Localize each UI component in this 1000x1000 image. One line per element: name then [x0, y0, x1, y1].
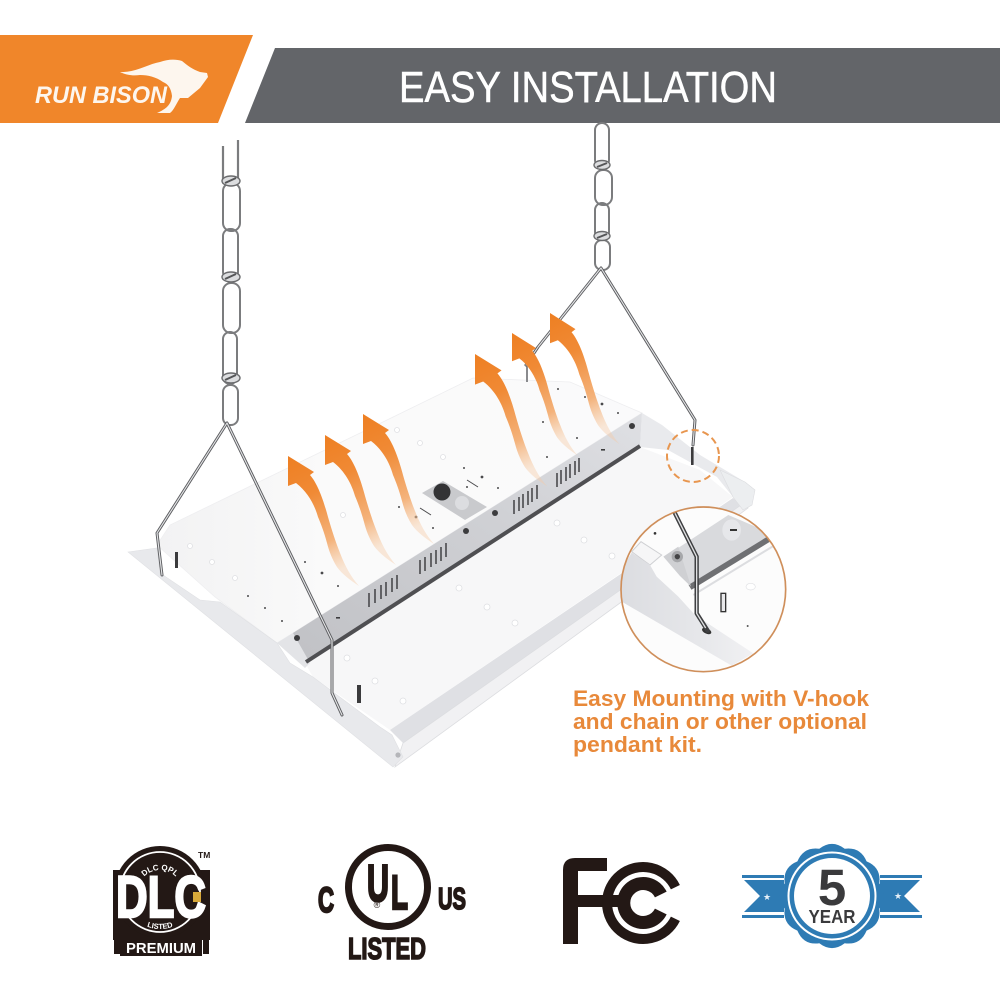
front light strip — [395, 505, 748, 767]
arrow 2 — [325, 435, 396, 565]
right end cap — [640, 413, 755, 505]
right chain — [594, 123, 612, 270]
certification: FCC — [563, 858, 675, 944]
left chain — [222, 140, 240, 425]
caption text — [573, 686, 870, 757]
magnified detail circle — [615, 507, 786, 672]
hook slots — [175, 366, 694, 703]
gold square — [193, 892, 201, 902]
product: LED high bay panel — [128, 366, 755, 767]
lower plate — [305, 447, 733, 730]
badge label: YEAR — [808, 907, 856, 927]
certification: cUL us listed: ® — [374, 900, 381, 910]
front gray band — [390, 498, 741, 743]
title: EASY INSTALLATION — [399, 63, 777, 112]
certification: cUL us listed: LISTED — [348, 931, 426, 966]
right V-hook — [526, 268, 695, 445]
upper plate — [157, 378, 642, 643]
rail holes — [294, 423, 635, 641]
central rail — [290, 413, 642, 663]
title banner — [245, 48, 1000, 123]
rail shadow strip — [306, 446, 640, 662]
ribbons — [742, 875, 922, 918]
arrow 1 — [288, 456, 359, 586]
certification: cUL us listed: U — [367, 855, 389, 913]
badge: 5 year warranty: ★ — [894, 891, 902, 901]
arrow 6 — [550, 313, 620, 444]
premium ribbon — [114, 934, 120, 954]
caption text: Easy Mounting with V-hook — [573, 686, 870, 711]
surface bumps — [188, 428, 615, 704]
logo wordmark: RUN BISON — [35, 82, 168, 109]
DLC letters: DLC — [116, 865, 206, 930]
icon: bison head — [120, 60, 208, 113]
badge number: 5 — [818, 859, 846, 916]
certification: DLC premium — [113, 846, 210, 957]
scalloped seal — [780, 844, 884, 948]
logo banner: Run Bison — [0, 35, 253, 123]
certification: cUL us listed: C — [318, 881, 334, 920]
rail vents — [369, 458, 579, 607]
junction plate — [422, 481, 487, 520]
badge: 5 year warranty: ★ — [763, 892, 771, 902]
callout marker: dashed circle — [667, 430, 719, 482]
end screw — [395, 752, 401, 758]
certification: cUL us listed — [318, 848, 466, 966]
certification: cUL us listed: L — [391, 867, 408, 920]
arrow 5 — [512, 333, 577, 455]
airflow arrows — [288, 313, 620, 586]
caption text: and chain or other optional — [573, 709, 867, 734]
certification: DLC premium: PREMIUM — [126, 941, 196, 957]
certification: cUL us listed: US — [438, 881, 466, 916]
LISTED label: LISTED — [147, 922, 172, 929]
rail flange — [277, 633, 310, 668]
badge: 5 year warranty — [742, 844, 922, 948]
right end block — [720, 470, 755, 510]
left V-hook — [157, 423, 342, 715]
DLC QPL label: DLC QPL — [141, 864, 177, 876]
trademark: TM — [198, 850, 210, 860]
left front band — [128, 548, 403, 767]
arrow 4 — [475, 354, 547, 487]
caption text: pendant kit. — [573, 732, 702, 757]
surface dots — [247, 388, 619, 622]
arrow 3 — [363, 414, 434, 544]
